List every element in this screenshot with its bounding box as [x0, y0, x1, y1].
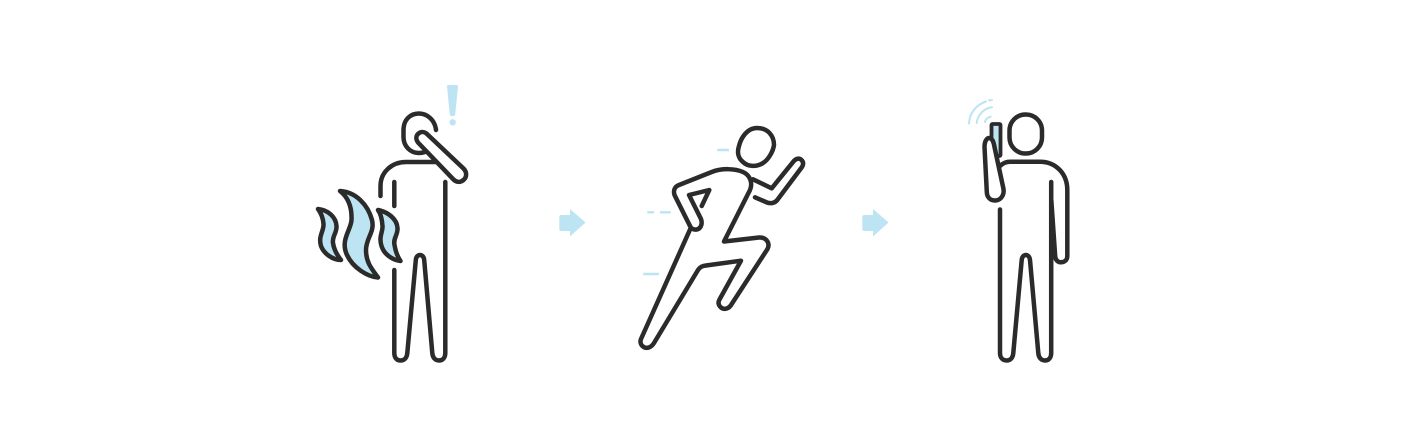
head [738, 128, 774, 166]
head [404, 114, 436, 153]
body and legs [1000, 162, 1067, 360]
body and legs [641, 169, 768, 348]
figure 2: running person [641, 128, 803, 348]
icon: exclamation mark [447, 85, 458, 126]
icon: smoke flames [318, 191, 400, 278]
figure 1: person smelling smoke [318, 85, 466, 360]
head [1010, 114, 1042, 154]
arrow 2 [862, 209, 888, 236]
raised arm [416, 132, 466, 182]
motion lines [643, 150, 729, 274]
signal arcs [969, 100, 992, 124]
arm holding phone [984, 138, 1004, 200]
phone [992, 124, 1000, 156]
figure 3: person on phone [969, 100, 1067, 361]
front arm [753, 159, 803, 203]
arrow 1 [559, 209, 586, 236]
body and legs [380, 162, 445, 360]
